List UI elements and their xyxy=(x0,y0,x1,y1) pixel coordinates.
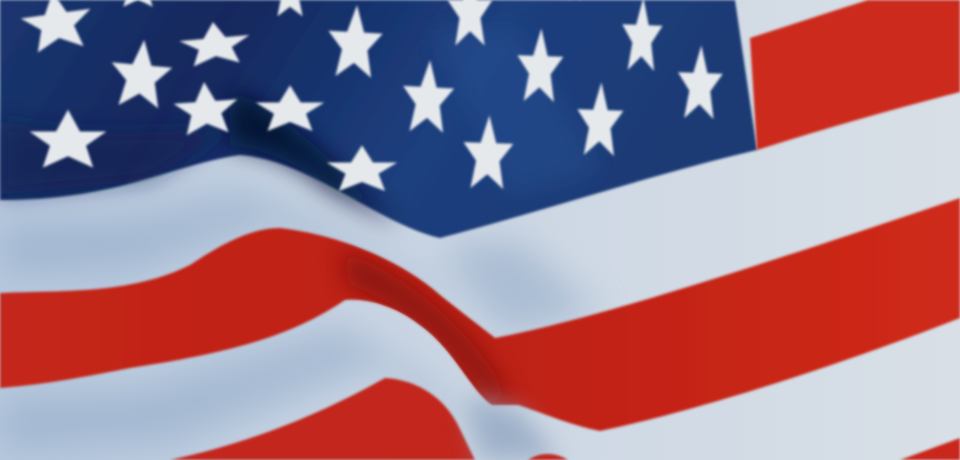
stars on the canton xyxy=(18,0,724,191)
red stripe: bottom right corner xyxy=(900,438,960,460)
red stripe: middle xyxy=(0,198,960,431)
white stripe shading xyxy=(0,190,600,450)
red stripe: lower centre xyxy=(170,378,475,460)
red stripe: top right xyxy=(750,0,960,150)
red stripe fold shadow xyxy=(340,250,510,402)
red stripe: small bottom fragment xyxy=(528,454,568,460)
blue canton xyxy=(0,0,757,238)
canton fold shadows xyxy=(0,30,600,225)
lower fold shadow xyxy=(465,395,560,460)
